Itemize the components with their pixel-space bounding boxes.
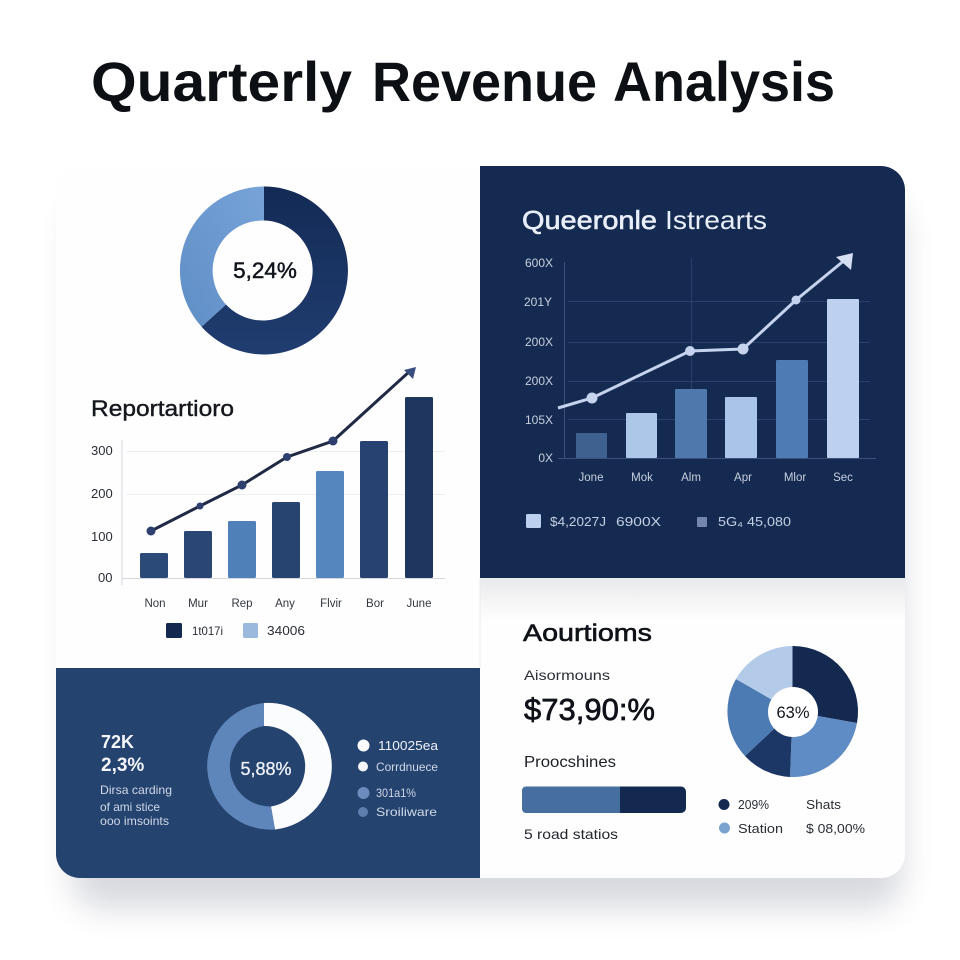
description: of ami stice — [100, 800, 160, 814]
x axis labels: Apr — [734, 472, 752, 484]
bars — [576, 299, 859, 458]
y axis labels: 100 — [91, 529, 113, 544]
y axis labels: 200X — [525, 335, 553, 349]
y axis labels: 200X — [525, 374, 553, 388]
panel heading: Istrearts — [665, 205, 767, 235]
pie chart: 63% — [776, 704, 810, 722]
chart heading: Reportartioro — [91, 396, 234, 421]
description — [100, 783, 172, 828]
pie legend: $ 08,00% — [806, 821, 865, 836]
pie legend: Shats — [806, 797, 842, 812]
x axis labels: Flvir — [320, 598, 342, 610]
key figures: 72K — [101, 732, 134, 752]
x axis labels: Rep — [231, 598, 253, 610]
legend: 6900X — [616, 514, 661, 529]
x axis labels: Mlor — [784, 472, 806, 484]
legend — [526, 514, 791, 529]
progress label: Proocshines — [524, 754, 616, 771]
legend: Sroiliware — [376, 805, 437, 819]
legend — [166, 623, 305, 638]
y axis labels — [524, 256, 553, 465]
dark panel shadow — [480, 578, 905, 620]
trend line with arrow — [146, 367, 416, 536]
legend: 34006 — [267, 623, 305, 638]
y axis labels: 600X — [525, 256, 553, 270]
description: ooo imsoints — [100, 814, 169, 828]
panel: bottom right metrics — [522, 620, 865, 842]
y axis labels: 300 — [91, 443, 113, 458]
x axis labels: Jone — [579, 472, 603, 484]
progress bar — [522, 786, 686, 813]
title: Quarterly — [91, 50, 352, 113]
x axis labels: Non — [144, 598, 166, 610]
legend: 1t017i — [192, 624, 223, 638]
key figures: 2,3% — [101, 755, 144, 776]
y axis labels: 201Y — [524, 295, 552, 309]
x axis labels: Mur — [188, 598, 208, 610]
trend line with arrow — [558, 253, 853, 408]
bars — [140, 397, 433, 578]
legend: Corrdnuece — [376, 760, 438, 774]
top donut chart — [180, 186, 348, 355]
title: Revenue — [372, 50, 597, 113]
legend: $4,2027J — [550, 514, 606, 529]
panel heading — [522, 205, 767, 235]
y axis labels: 00 — [98, 570, 112, 585]
donut chart — [207, 703, 332, 830]
y axis labels — [91, 443, 113, 585]
pie legend: 209% — [738, 797, 769, 812]
title — [91, 50, 835, 113]
x axis labels: Any — [275, 598, 295, 610]
donut value: 5,24% — [233, 258, 297, 283]
panel: left bar and line chart — [91, 367, 445, 638]
legend: 110025ea — [378, 738, 439, 753]
card shadow — [72, 200, 902, 908]
key figures — [101, 732, 144, 776]
x axis labels — [144, 598, 431, 610]
card background — [56, 166, 905, 878]
pie legend: Station — [738, 821, 783, 836]
y axis labels: 0X — [538, 451, 553, 465]
metric value: $73,90:% — [524, 692, 655, 727]
panel heading: Aourtioms — [523, 620, 652, 647]
x axis labels: Sec — [833, 472, 853, 484]
y axis labels: 105X — [525, 413, 553, 427]
pie legend — [718, 797, 865, 836]
panel heading: Queeronle — [522, 205, 657, 235]
x axis labels: Alm — [681, 472, 701, 484]
x axis labels: June — [407, 598, 431, 610]
x axis labels — [579, 472, 853, 484]
x axis labels: Bor — [366, 598, 384, 610]
panel: top right dark chart — [480, 166, 905, 578]
y axis labels: 200 — [91, 486, 113, 501]
panel: bottom left blue summary — [56, 668, 480, 878]
x axis labels: Mok — [631, 472, 653, 484]
legend — [358, 738, 439, 819]
pie chart — [727, 646, 858, 777]
legend: 5G₄ 45,080 — [718, 514, 791, 529]
description: Dirsa carding — [100, 783, 172, 797]
metric label: Aisormouns — [524, 667, 610, 683]
title: Analysis — [613, 50, 835, 113]
legend: 301a1% — [376, 786, 416, 800]
progress caption: 5 road statios — [524, 826, 618, 842]
donut chart: 5,88% — [240, 759, 292, 779]
